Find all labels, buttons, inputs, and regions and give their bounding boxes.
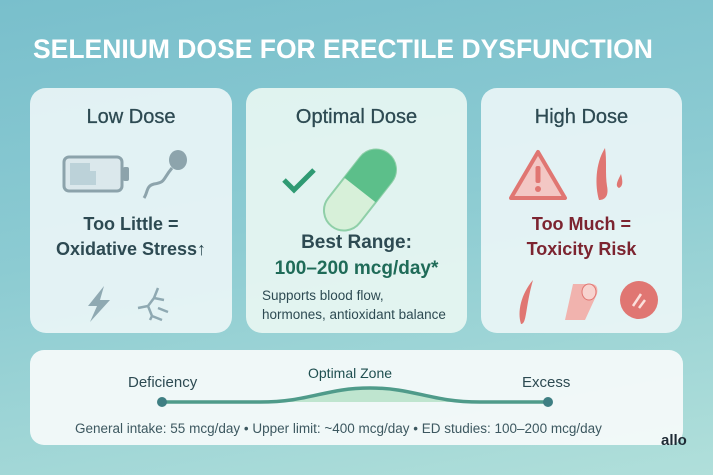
title: SELENIUM DOSE FOR ERECTILE DYSFUNCTION — [33, 34, 653, 64]
text: supports: hormones, antioxidant balance — [262, 307, 446, 322]
text: too much — [526, 214, 636, 259]
heading: low dose: Low Dose — [87, 106, 175, 128]
icon: circle — [620, 281, 658, 319]
icon: lightning — [88, 286, 110, 322]
panel: low dose — [30, 88, 232, 333]
label: optimal zone: Optimal Zone — [308, 365, 392, 381]
text: supports: Supports blood flow, — [262, 288, 384, 303]
text: intake notes: General intake: 55 mcg/day • Upper limit: ~400 mcg/day • ED studies: 100–200 mcg/day — [75, 421, 602, 436]
icon: hair — [520, 280, 533, 324]
text: best range — [275, 232, 438, 279]
icon: capsule — [323, 148, 397, 232]
text: best range: 100–200 mcg/day* — [275, 258, 438, 279]
logo: allo: allo — [661, 432, 687, 449]
icon: crack — [138, 288, 168, 321]
icon: hair drop — [596, 148, 622, 200]
icon: warning — [509, 150, 568, 200]
chart: dose curve — [157, 386, 553, 407]
heading: optimal dose: Optimal Dose — [296, 106, 417, 128]
icon: low battery — [62, 156, 129, 192]
text: too little: Oxidative Stress↑ — [56, 239, 206, 259]
heading: high dose: High Dose — [535, 106, 628, 128]
text: too much: Toxicity Risk — [527, 239, 636, 259]
icon: sperm — [142, 150, 187, 199]
icon: nail — [565, 284, 598, 320]
text: supports — [262, 288, 446, 322]
label: excess: Excess — [522, 374, 570, 391]
panel: high dose — [481, 88, 682, 333]
text: too little — [56, 214, 206, 259]
text: best range: Best Range: — [301, 232, 412, 253]
panel: dose scale — [30, 350, 683, 445]
panel: optimal dose — [246, 88, 467, 333]
text: too little: Too Little = — [83, 214, 179, 234]
text: too much: Too Much = — [532, 214, 631, 234]
icon: check — [282, 168, 316, 194]
label: deficiency: Deficiency — [128, 374, 197, 391]
